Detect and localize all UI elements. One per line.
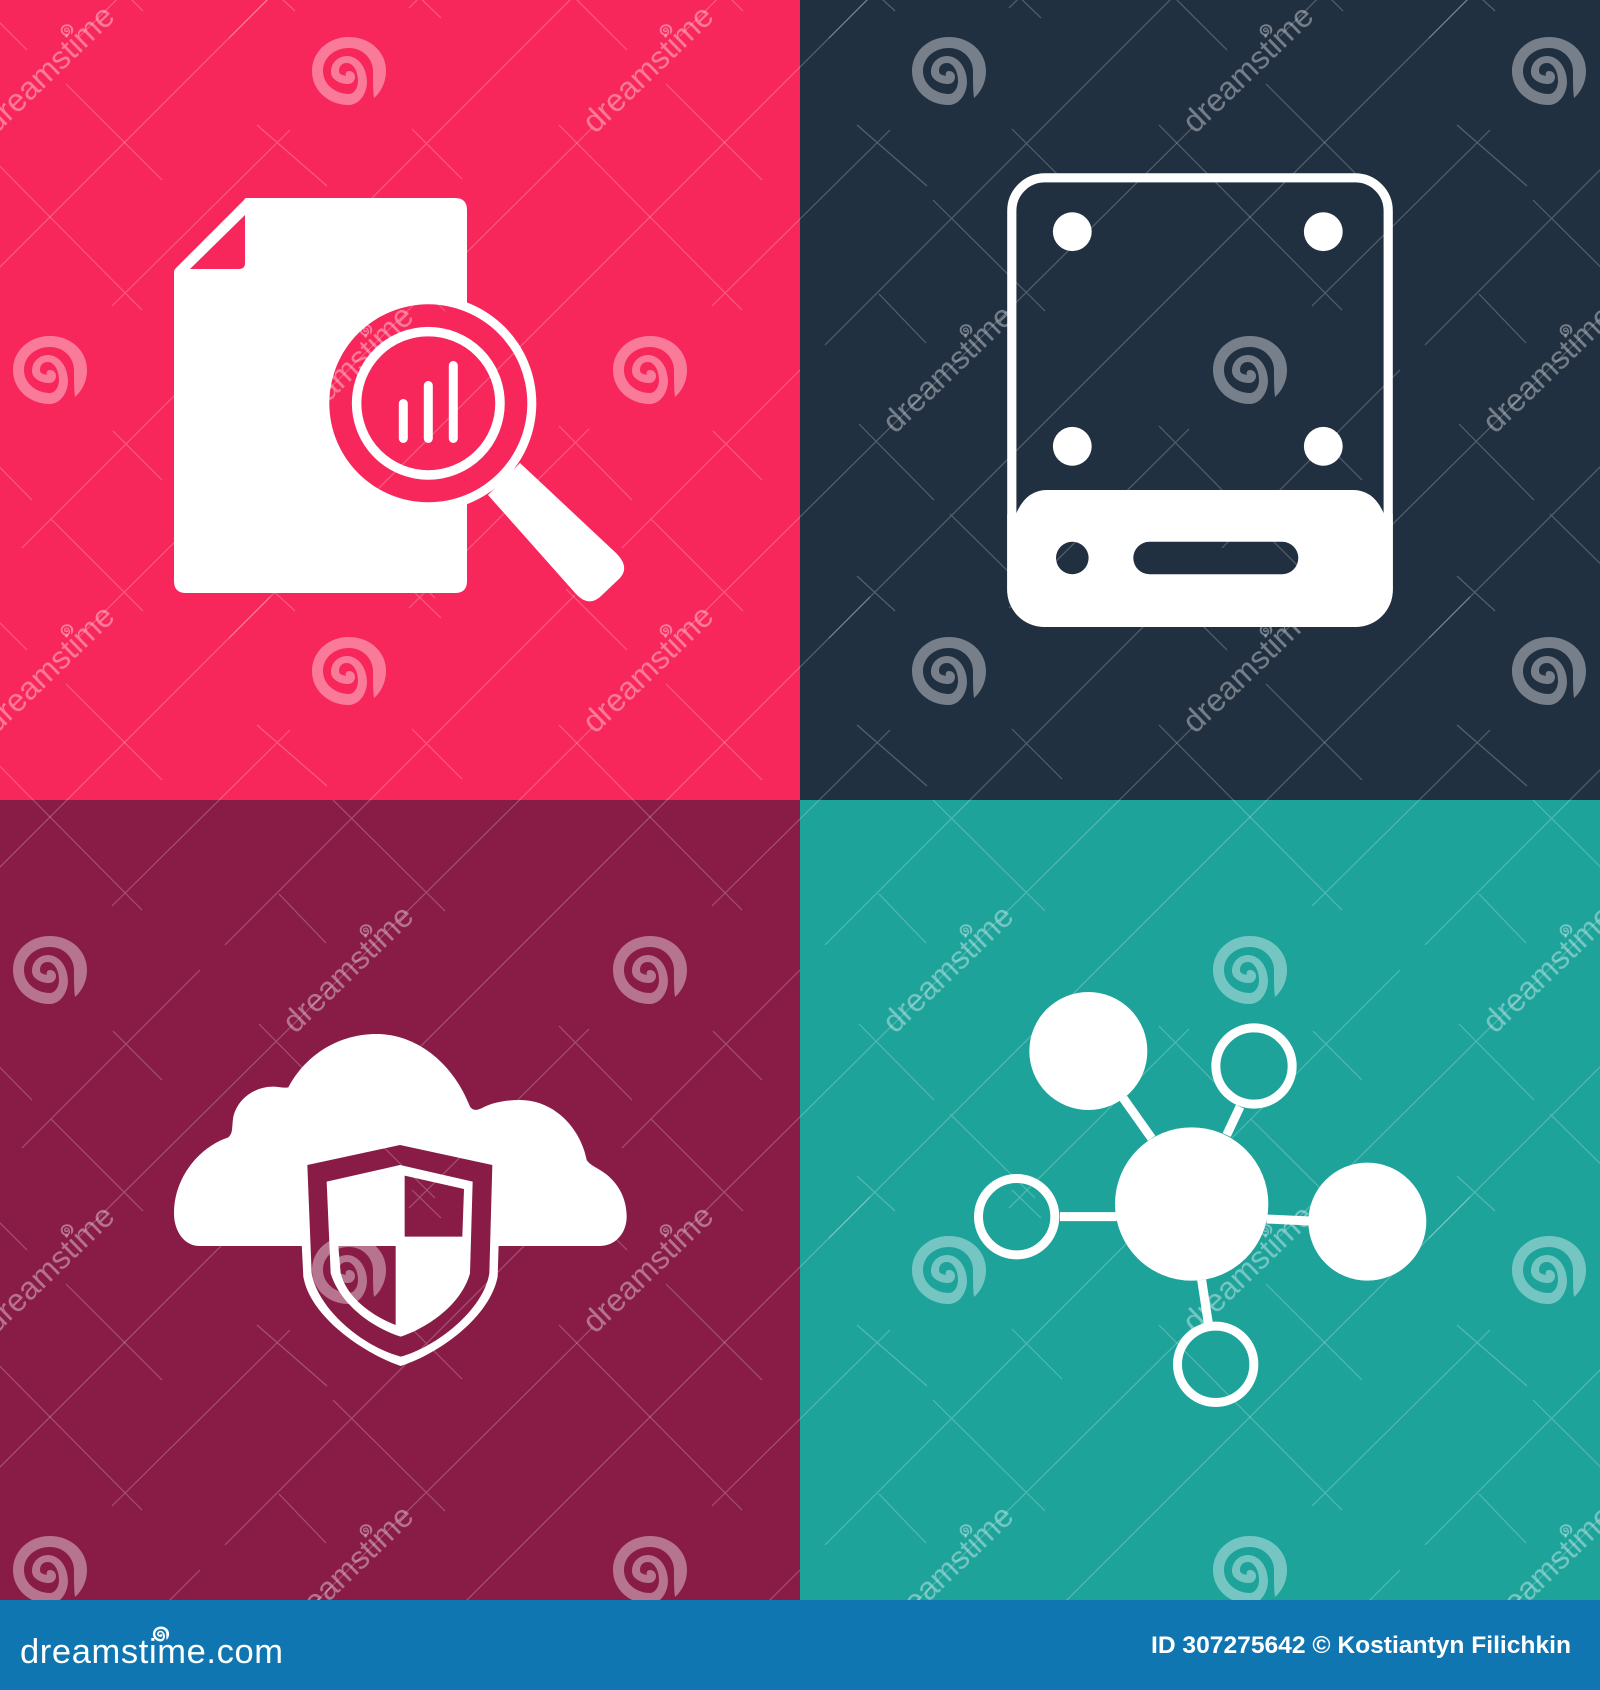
icon: cloud with security shield — [174, 1034, 627, 1366]
icon: document with magnifying glass and bar chart — [174, 198, 624, 601]
watermark text: dreamstime — [275, 298, 420, 440]
icon: network hub with connected nodes — [978, 992, 1426, 1402]
watermark text: dreamstime — [575, 1198, 720, 1340]
watermark text: dreamstime — [575, 0, 720, 140]
watermark text: dreamstime — [875, 898, 1020, 1040]
icon: hard disk drive — [1007, 178, 1393, 627]
panel: maroon background — [0, 800, 800, 1600]
watermark text: dreamstime — [875, 1498, 1020, 1640]
footer logo spiral — [153, 1627, 169, 1641]
watermark text: dreamstime — [1175, 598, 1320, 740]
footer bar — [0, 1600, 1600, 1690]
watermark text: dreamstime — [875, 298, 1020, 440]
watermark text: dreamstime — [575, 598, 720, 740]
panel: navy background — [800, 0, 1600, 800]
panel: pink background — [0, 0, 800, 800]
image ID and credit: ID 307275642 © Kostiantyn Filichkin — [1151, 1632, 1571, 1659]
watermark text: dreamstime — [1175, 1198, 1320, 1340]
watermark text: dreamstime — [275, 1498, 420, 1640]
watermark text: dreamstime — [275, 898, 420, 1040]
watermark text: dreamstime — [1175, 0, 1320, 140]
footer logo text: dreamstime.com — [20, 1633, 283, 1671]
panel: teal background — [800, 800, 1600, 1600]
